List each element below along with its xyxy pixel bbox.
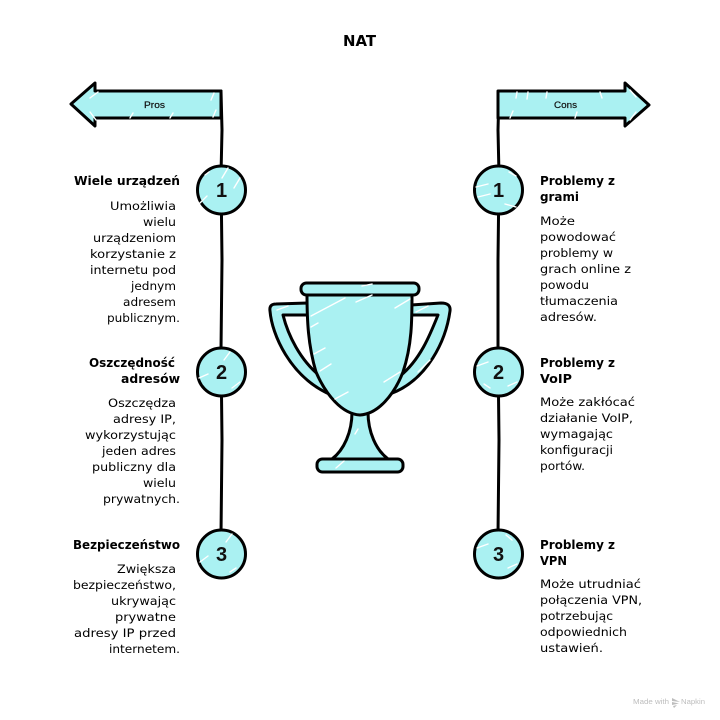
body text: grach online z: [540, 262, 631, 276]
body text: publiczny dla: [92, 460, 176, 474]
body text: odpowiednich: [540, 625, 627, 639]
trophy base: [317, 459, 403, 472]
body text: [90, 199, 180, 325]
badge: cons 3: 3: [493, 544, 504, 566]
heading: Problemy z: [540, 174, 615, 188]
heading: VoIP: [540, 372, 572, 386]
heading: [540, 356, 615, 386]
heading: Problemy z: [540, 356, 615, 370]
watermark: [633, 697, 705, 708]
trophy left handle: [270, 303, 327, 393]
badge: cons 2: [474, 348, 522, 396]
body text: wykorzystując: [85, 428, 176, 442]
arrow: cons: [498, 83, 649, 126]
body text: powodu: [540, 278, 589, 292]
body text: Oszczędza: [108, 396, 176, 410]
trophy right handle: [390, 303, 450, 394]
arrow: pros: [71, 83, 221, 126]
body text: ustawień.: [540, 641, 603, 655]
body text: Może utrudniać: [540, 577, 641, 591]
line: cons timeline: [498, 91, 499, 535]
body text: problemy w: [540, 246, 613, 260]
body text: adresy IP przed: [74, 626, 176, 640]
heading: VPN: [540, 554, 567, 568]
cons item 3: [540, 538, 642, 655]
heading: Problemy z: [540, 538, 615, 552]
badge: pros 3: 3: [216, 544, 227, 566]
pros item 1: [74, 174, 180, 325]
body text: portów.: [540, 459, 585, 473]
body text: [73, 562, 180, 656]
badge: cons 1: 1: [493, 180, 504, 202]
body text: korzystanie z: [90, 247, 176, 261]
body text: Może: [540, 214, 575, 228]
watermark: Napkin: [681, 697, 705, 706]
watermark: Made with: [633, 697, 669, 706]
body text: Umożliwia: [110, 199, 176, 213]
body text: [540, 395, 635, 473]
title: NAT: [343, 32, 377, 50]
heading: [89, 356, 180, 386]
body text: jeden adres: [101, 444, 176, 458]
body text: Zwiększa: [117, 562, 176, 576]
body text: [540, 214, 631, 324]
badge: pros 2: [198, 348, 246, 396]
body text: wielu: [143, 476, 176, 490]
body text: działanie VoIP,: [540, 411, 633, 425]
heading: [540, 174, 615, 204]
badge: cons 1: [474, 166, 522, 214]
trophy cup: [307, 294, 412, 415]
trophy stem: [332, 412, 388, 459]
badge: pros 1: [198, 166, 246, 214]
body text: Może zakłócać: [540, 395, 635, 409]
badge: cons 3: [474, 530, 522, 578]
body text: [85, 396, 180, 506]
pros item 2: [85, 356, 180, 506]
body text: powodować: [540, 230, 616, 244]
body text: potrzebując: [540, 609, 613, 623]
label: cons: Cons: [554, 100, 578, 110]
body text: urządzeniom: [93, 231, 176, 245]
body text: publicznym.: [107, 311, 180, 325]
body text: wielu: [143, 215, 176, 229]
badge: pros 2: 2: [216, 362, 227, 384]
label: pros: Pros: [144, 100, 166, 110]
badge: cons 2: 2: [493, 362, 504, 384]
pros item 3: [73, 538, 180, 656]
body text: internetem.: [109, 642, 180, 656]
body text: prywatne: [115, 610, 176, 624]
line: pros timeline: [221, 91, 222, 535]
body text: ukrywając: [111, 594, 176, 608]
icon: napkin logo: [672, 698, 680, 708]
badge: pros 3: [198, 530, 246, 578]
trophy rim: [301, 283, 419, 295]
body text: adresów.: [540, 310, 597, 324]
heading: grami: [540, 190, 579, 204]
body text: internetu pod: [90, 263, 176, 277]
body text: adresy IP,: [113, 412, 176, 426]
body text: połączenia VPN,: [540, 593, 642, 607]
body text: [540, 577, 642, 655]
body text: konfiguracji: [540, 443, 613, 457]
body text: bezpieczeństwo,: [73, 578, 176, 592]
heading: adresów: [121, 372, 180, 386]
body text: jednym: [130, 279, 176, 293]
heading: [540, 538, 615, 568]
heading: Oszczędność: [89, 356, 175, 370]
body text: prywatnych.: [103, 492, 180, 506]
icon: trophy: [270, 283, 450, 472]
body text: wymagając: [540, 427, 613, 441]
heading: Bezpieczeństwo: [73, 538, 180, 552]
cons item 2: [540, 356, 635, 473]
heading: Wiele urządzeń: [74, 174, 180, 188]
body text: adresem: [123, 295, 176, 309]
cons item 1: [540, 174, 631, 324]
body text: tłumaczenia: [540, 294, 618, 308]
badge: pros 1: 1: [216, 180, 227, 202]
